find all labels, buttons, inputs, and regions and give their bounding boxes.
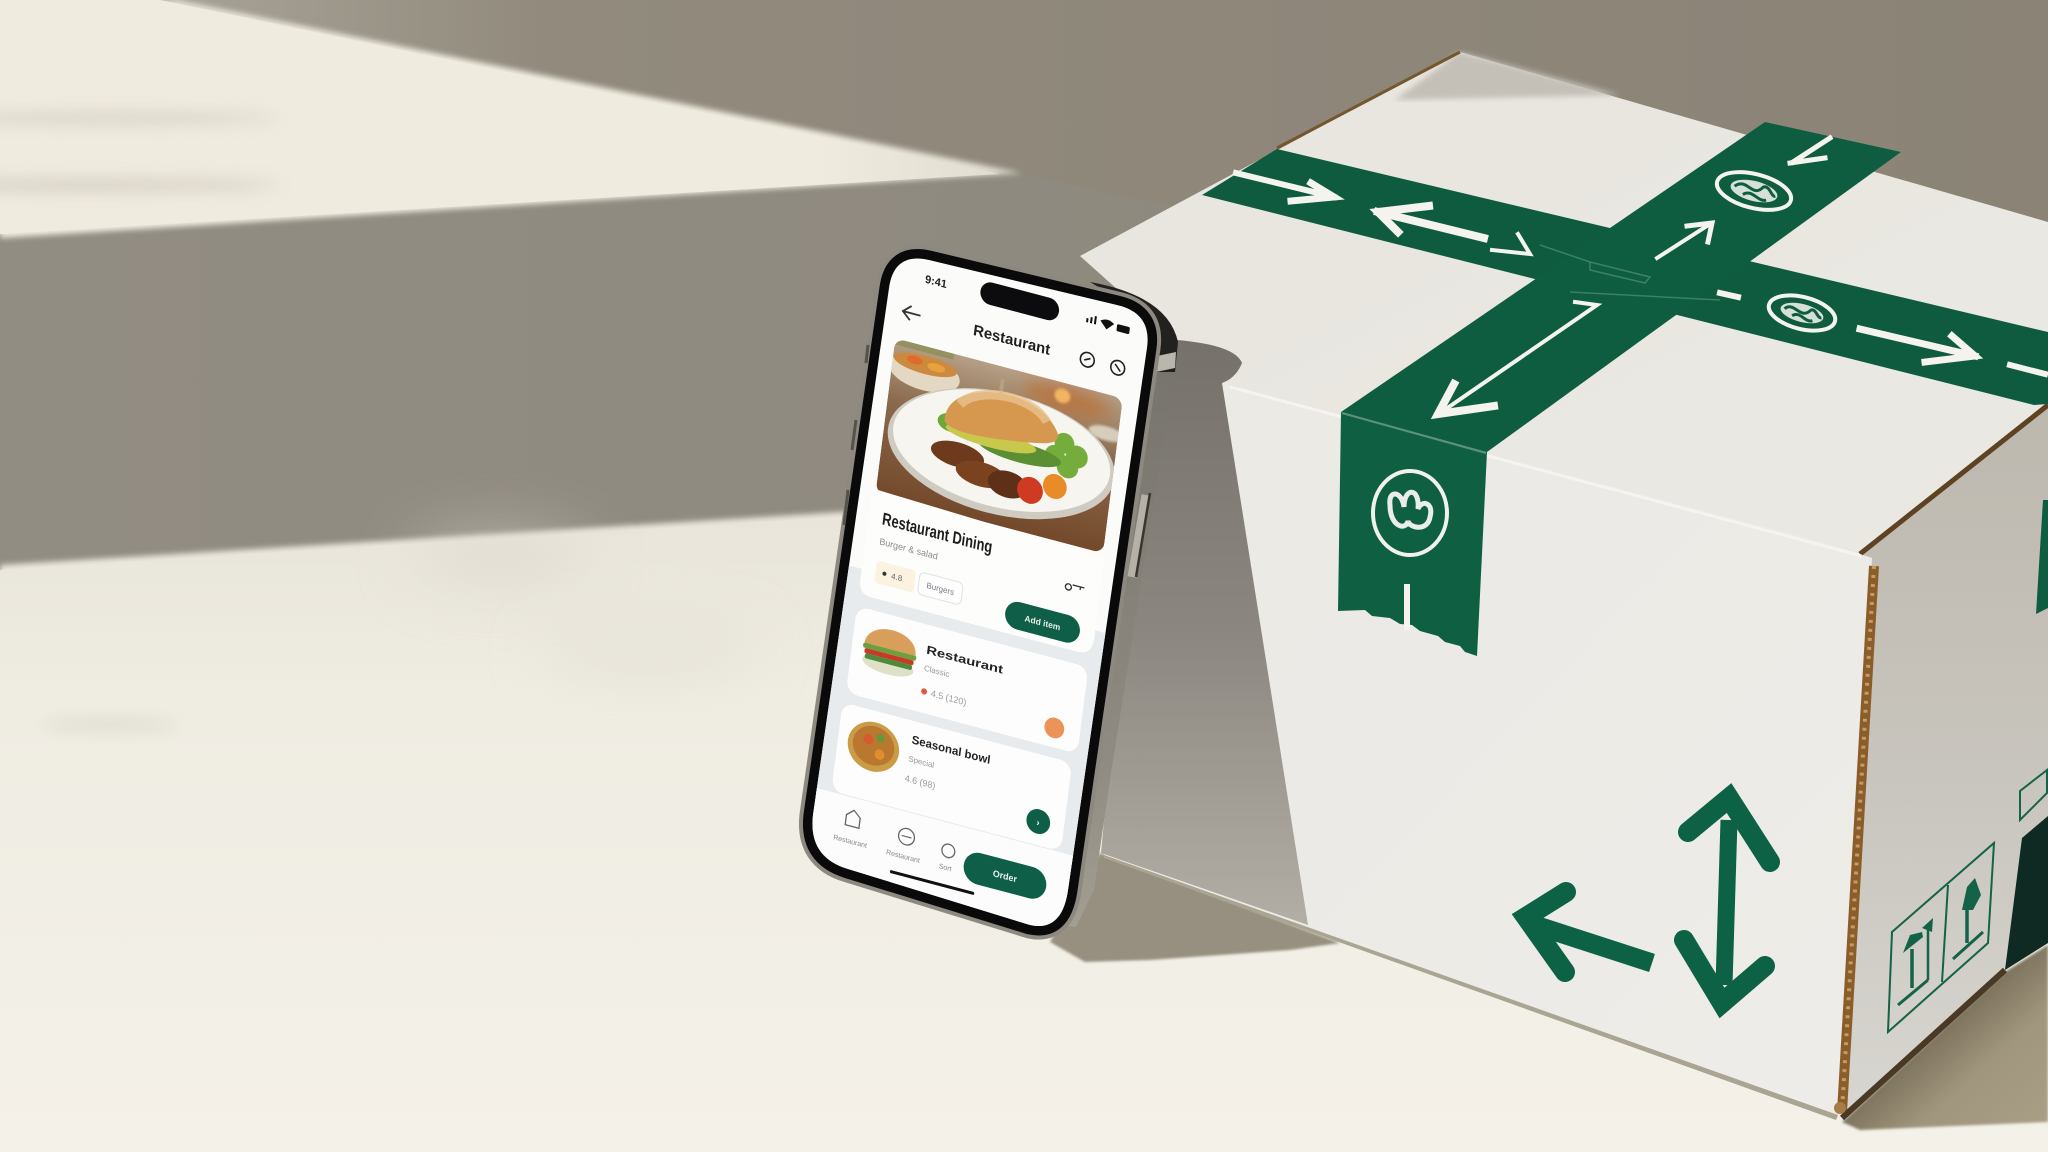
left arrow (1526, 892, 1652, 972)
green tape down the front (1338, 412, 1487, 656)
lettuce (1046, 432, 1088, 478)
plate (888, 388, 1114, 520)
phone top corner band (1090, 282, 1178, 372)
checkout button (962, 849, 1048, 902)
top shaded corner (1395, 52, 1620, 100)
patties (931, 440, 984, 467)
burger thumbnail (862, 629, 916, 676)
shadow: box on floor (1842, 945, 2048, 1130)
phone left buttons (844, 345, 868, 525)
header icons (1080, 351, 1125, 377)
status icons (1086, 316, 1130, 334)
sunlit floor (0, 500, 2048, 1152)
rating chip: 4.8 (891, 572, 903, 584)
shadow: phone on floor (1050, 853, 1340, 962)
item subtitle: Classic (924, 664, 950, 679)
cardboard edges (1230, 52, 2048, 1118)
tomato (1017, 476, 1043, 504)
nav search: Sort (938, 862, 952, 873)
item subtitle: Special (908, 754, 935, 770)
tag chip: Burgers (926, 581, 955, 597)
box right face (1842, 405, 2048, 1118)
list card 1 (846, 606, 1088, 754)
home indicator (890, 870, 974, 895)
skewer (999, 379, 1004, 394)
back arrow (902, 305, 921, 321)
nav home: Restaurant (833, 833, 867, 850)
tape arrows (1236, 138, 2045, 630)
list card 2 (831, 702, 1072, 851)
phone shadow on box (1101, 335, 1308, 925)
hero food photo (873, 337, 1129, 555)
green tape horizontal (1202, 149, 2048, 405)
item title: Restaurant (926, 643, 1004, 677)
phone side button (1132, 493, 1150, 577)
order button: Add item (1024, 613, 1061, 633)
side bowl (891, 354, 960, 392)
box front face (1100, 300, 1872, 1118)
nav orders: Restaurant (886, 848, 920, 865)
order button (1005, 602, 1080, 643)
phone frame (812, 259, 1148, 926)
item rating: 4.6 (98) (904, 773, 936, 791)
item title: Seasonal bowl (911, 733, 991, 767)
tape wrinkles (1540, 245, 1720, 300)
dish name: Restaurant Dining (881, 508, 994, 557)
green round button (1026, 809, 1050, 834)
screen title: Restaurant (972, 322, 1051, 359)
orange add button (1044, 718, 1064, 738)
phone bezel (812, 259, 1148, 926)
green tape cross (1341, 122, 1901, 452)
nav home (834, 810, 867, 848)
tape logo: cross (1713, 165, 1795, 217)
checkout button: Order (992, 868, 1018, 885)
green arrows on box front (1526, 798, 1770, 1003)
dark label on right face (2005, 816, 2048, 970)
info card (859, 488, 1106, 656)
notch (980, 282, 1060, 320)
double-headed arrow (1684, 798, 1770, 1003)
orange vegetable (1043, 474, 1067, 499)
rating chip (874, 560, 916, 593)
bottom nav bar (812, 788, 1073, 926)
green round button: › (1036, 817, 1040, 828)
phone screen (812, 258, 1148, 926)
box top face (1080, 52, 2048, 552)
box underside edge (1104, 855, 1838, 1120)
dish subtitle: Burger & salad (879, 536, 938, 562)
phone (798, 249, 1178, 940)
bun (944, 392, 1058, 444)
handling labels on right face (1888, 770, 2047, 1032)
sunlight wedge (0, 0, 1022, 238)
bowl thumbnail (848, 722, 900, 772)
status time: 9:41 (924, 274, 948, 291)
tape logo: front (1373, 471, 1447, 555)
tape logo: right (1765, 289, 1839, 337)
nav search (939, 843, 956, 872)
phone side wall (1060, 368, 1175, 927)
key icon (1064, 583, 1084, 591)
cardboard box (1080, 52, 2048, 1120)
tag chip (917, 572, 963, 605)
tape end on right side (2036, 500, 2048, 614)
item rating: 4.5 (120) (930, 688, 967, 708)
nav orders (886, 828, 920, 863)
